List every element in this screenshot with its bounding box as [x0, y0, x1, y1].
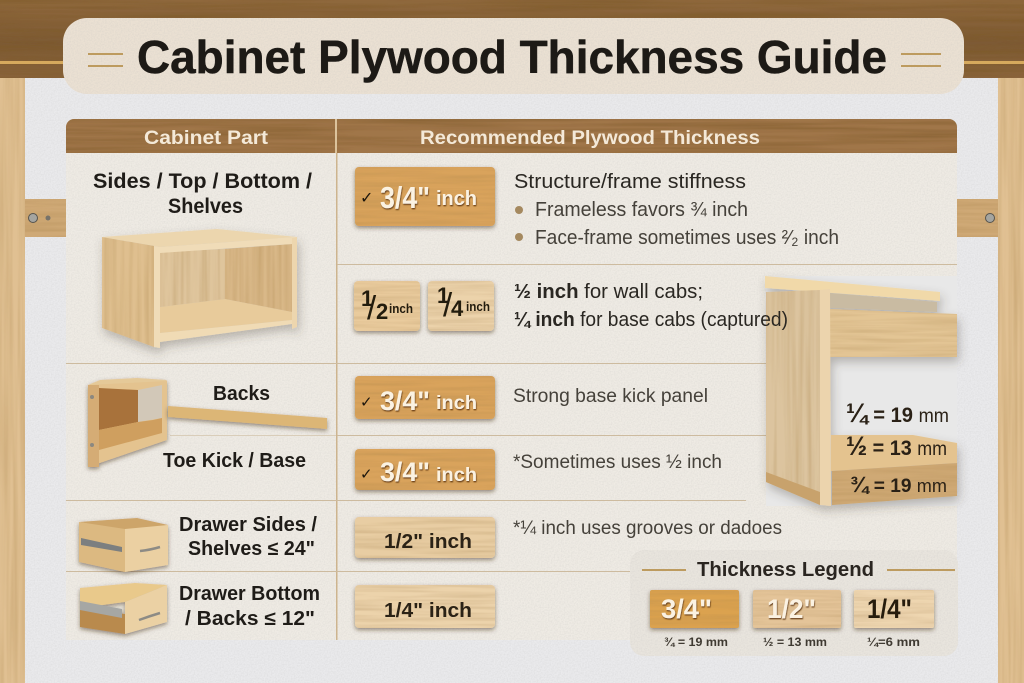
frame: top wood beam — [0, 0, 1024, 78]
text: base kick panel: Strong base kick panel — [513, 386, 708, 407]
row label: sides top bottom shelves — [93, 170, 312, 218]
text: structure notes: Face-frame sometimes uses ²⁄₂ inch — [535, 227, 839, 249]
text: wall and base cab backs — [514, 281, 788, 331]
table body — [66, 153, 957, 640]
text: wall and base cab backs: ½ inch for wall cabs; — [514, 281, 703, 303]
legend conversions: ¾ = 19 mm — [664, 635, 728, 649]
table — [66, 119, 957, 640]
swatch: one half — [753, 590, 841, 628]
badge: three quarter inch, backs: 3/4" — [380, 386, 430, 416]
text: structure notes: Structure/frame stiffness — [514, 171, 746, 193]
row label: drawer bottom: / Backs ≤ 12" — [185, 608, 315, 630]
badge: three quarter inch, toe kick: inch — [436, 465, 477, 486]
row label: toe kick and base: Toe Kick / Base — [163, 450, 306, 472]
text: wall and base cab backs: ¼ inch for base cabs (captured) — [514, 309, 788, 331]
badge: one half inch: 2 — [376, 299, 388, 324]
legend title: Thickness Legend — [697, 559, 874, 581]
badge: one half inch: / — [367, 289, 377, 326]
row label: sides top bottom shelves: Shelves — [168, 195, 243, 218]
text: sometimes uses half inch: *Sometimes uses ½ inch — [513, 452, 722, 473]
badge: one quarter inch: inch — [466, 299, 490, 314]
frame: left wood post — [0, 78, 25, 683]
icon: toe kick board — [168, 406, 327, 429]
icon: drawer two — [80, 583, 167, 634]
badge: one quarter inch: / — [443, 286, 453, 323]
badge: three quarter inch, structure: ✓ — [360, 190, 373, 207]
swatch: one half: 1/2" — [767, 594, 816, 624]
swatch: one quarter: 1/4" — [867, 594, 912, 624]
icon: base cabinet corner — [88, 378, 167, 467]
icon: drawer one — [79, 518, 168, 572]
row label: drawer sides: Shelves ≤ 24" — [188, 538, 315, 560]
cross-section labels: ½ = 13 mm — [846, 431, 947, 461]
icon: wall cabinet — [102, 229, 297, 348]
legend conversions — [664, 635, 920, 649]
badge: one half inch, drawer sides — [355, 517, 495, 558]
badge: one quarter inch: 1 — [437, 283, 449, 308]
cross-section labels: ¼ = 19 mm — [846, 398, 949, 428]
badge: one half inch: 1 — [361, 286, 373, 311]
badge: one half inch, drawer sides: 1/2" inch — [384, 531, 472, 553]
badge: one quarter inch: 4 — [451, 296, 464, 321]
left strap with screws — [25, 199, 66, 237]
swatch: one quarter — [854, 590, 934, 628]
panel: thickness legend — [630, 550, 958, 656]
cross-section labels — [846, 398, 949, 497]
text: structure notes: Frameless favors ¾ inch — [535, 199, 748, 221]
badge: three quarter inch, backs: inch — [436, 393, 477, 414]
right strap with screws — [940, 199, 998, 237]
illustration: cabinet cross-section — [765, 276, 957, 506]
badge: three quarter inch, structure — [355, 167, 495, 226]
row label: drawer bottom — [179, 583, 320, 630]
row label: drawer bottom: Drawer Bottom — [179, 583, 320, 605]
row label: backs: Backs — [213, 383, 270, 405]
swatch: three quarter: 3/4" — [661, 594, 712, 624]
badge: three quarter inch, backs: ✓ — [360, 394, 373, 411]
title banner — [63, 18, 964, 94]
row label: drawer sides — [179, 514, 317, 560]
legend conversions: ½ = 13 mm — [763, 635, 827, 649]
badge: three quarter inch, structure: 3/4" — [380, 180, 430, 215]
table header: Cabinet Part — [144, 128, 269, 149]
badge: one half inch — [354, 281, 420, 331]
row label: sides top bottom shelves: Sides / Top / Bottom / — [93, 170, 312, 193]
title: Cabinet Plywood Thickness Guide — [137, 31, 887, 83]
swatch: three quarter — [650, 590, 739, 628]
row label: drawer sides: Drawer Sides / — [179, 514, 317, 536]
badge: one half inch: inch — [389, 301, 413, 316]
badge: three quarter inch, toe kick — [355, 449, 495, 490]
badge: three quarter inch, structure: inch — [436, 188, 477, 210]
table header — [66, 119, 957, 153]
badge: one quarter inch — [428, 281, 494, 331]
table header: Recommended Plywood Thickness — [420, 128, 760, 149]
badge: one quarter inch, drawer bottom: 1/4" inch — [384, 600, 472, 622]
badge: three quarter inch, backs — [355, 376, 495, 419]
text: structure notes — [514, 171, 839, 249]
text: grooves or dadoes: *¼ inch uses grooves or dadoes — [513, 518, 782, 539]
frame: right wood post — [998, 78, 1024, 683]
badge: three quarter inch, toe kick: 3/4" — [380, 457, 430, 487]
legend conversions: ¼=6 mm — [867, 635, 920, 649]
cross-section labels: ¾ = 19 mm — [850, 472, 947, 497]
badge: three quarter inch, toe kick: ✓ — [360, 466, 373, 483]
badge: one quarter inch, drawer bottom — [355, 585, 495, 628]
